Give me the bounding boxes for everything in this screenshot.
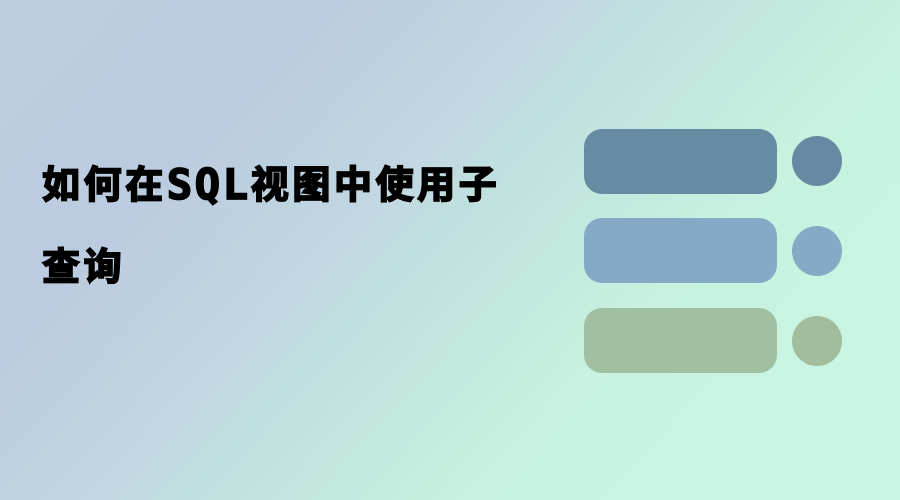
icon: list graphic bbox=[584, 129, 842, 373]
mid blue bar bbox=[584, 218, 777, 283]
dark blue dot bbox=[792, 136, 842, 186]
dark blue bar bbox=[584, 128, 777, 194]
green dot bbox=[792, 316, 842, 366]
green bar bbox=[584, 308, 777, 372]
title line 2: 查询 bbox=[42, 247, 125, 289]
title line 1: 如何在SQL视图中使用子 bbox=[42, 160, 500, 209]
mid blue dot bbox=[792, 226, 842, 276]
